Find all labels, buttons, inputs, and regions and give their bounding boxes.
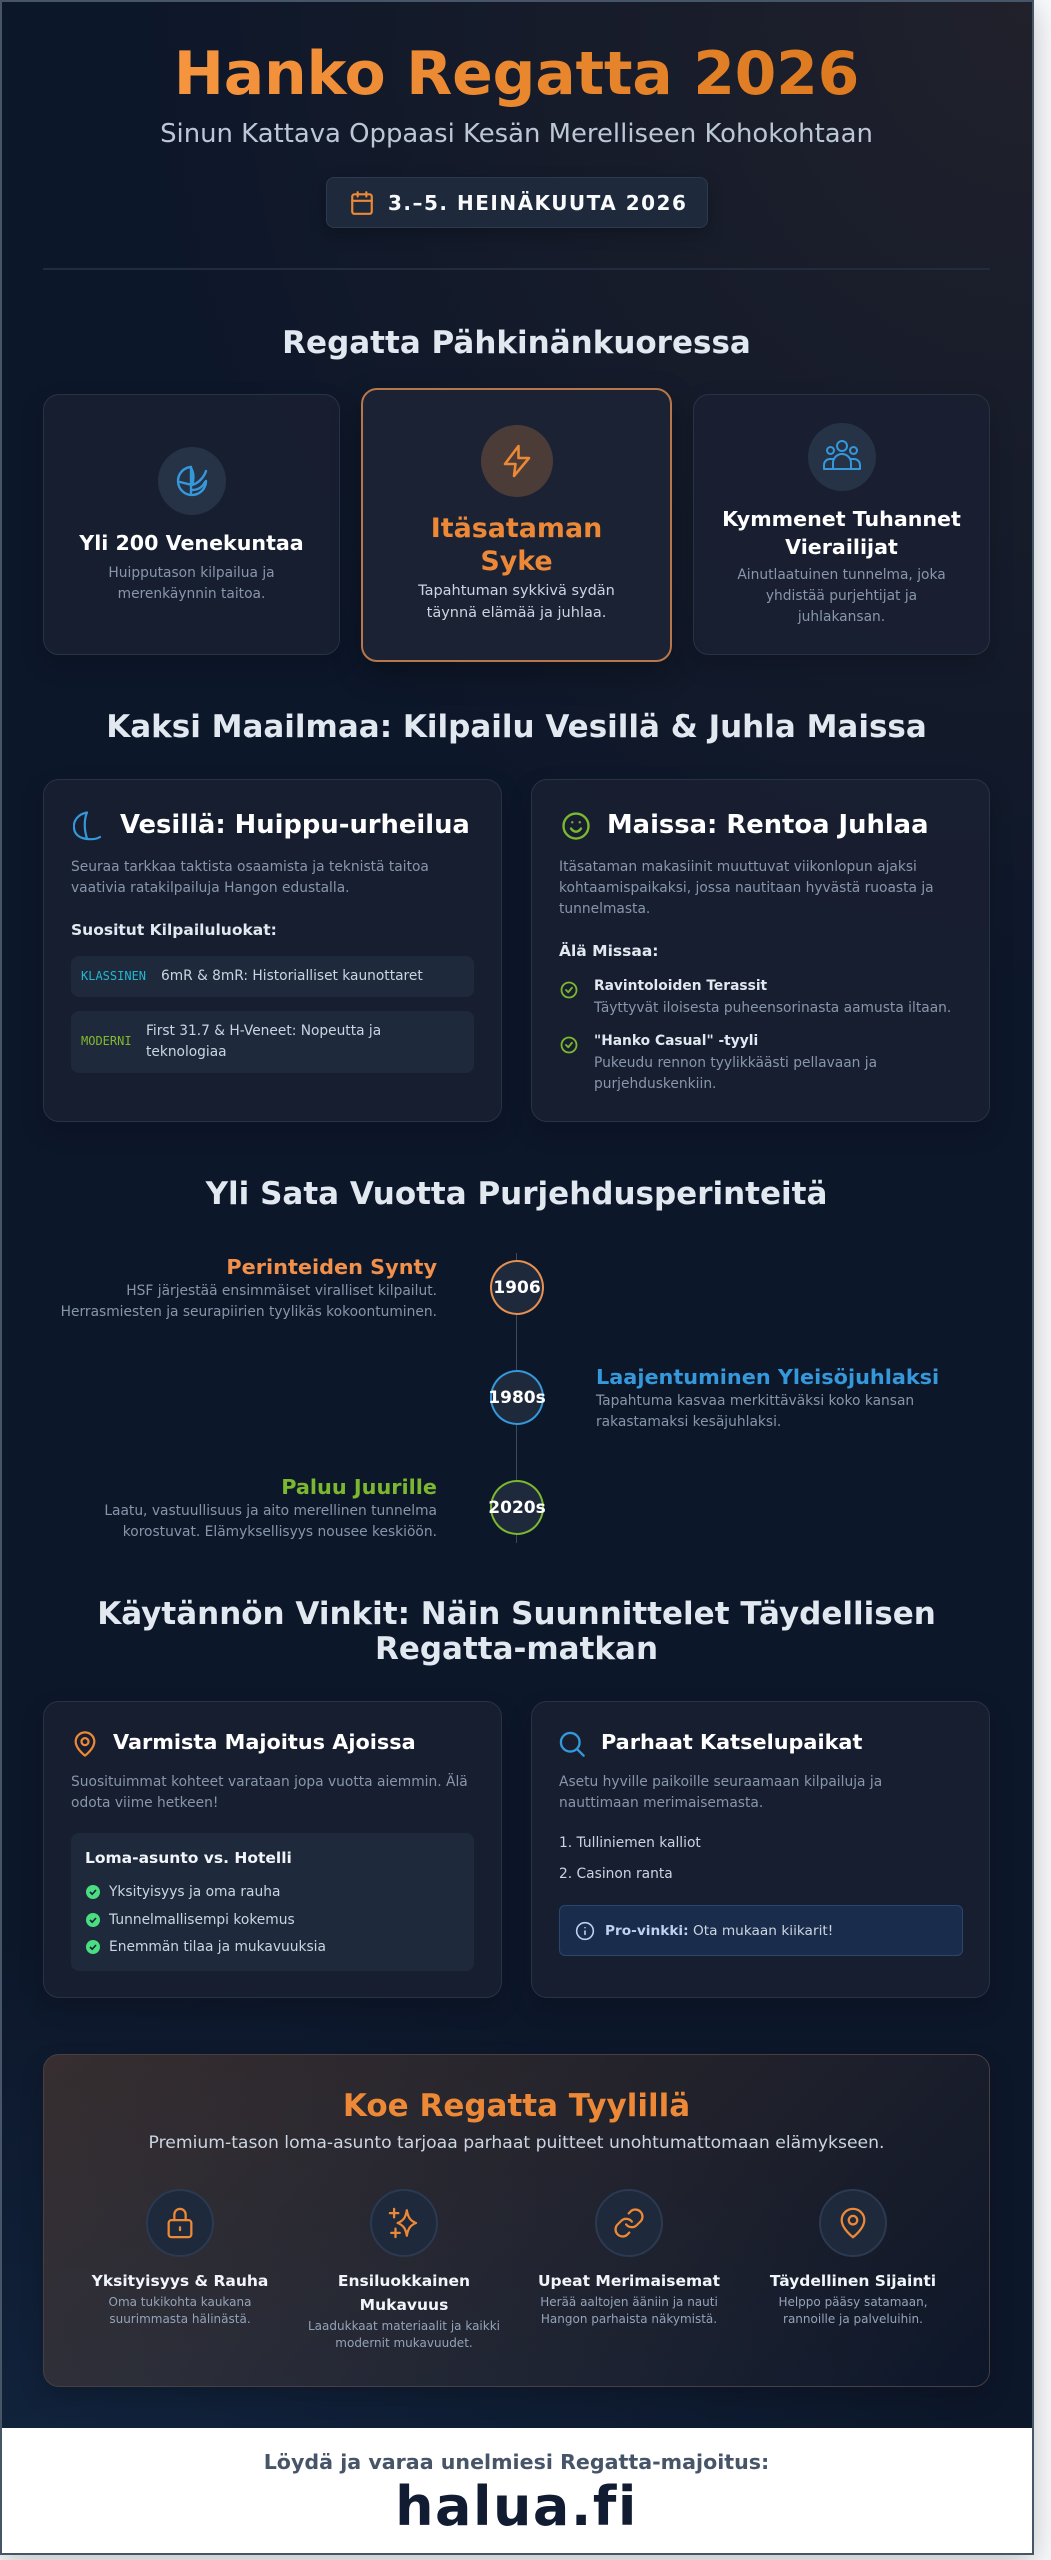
feature text	[108, 2295, 252, 2326]
stat description	[418, 583, 615, 621]
milestone text: korostuvat. Elämyksellisyys nousee keskiöön.	[123, 1524, 437, 1540]
feature title: Täydellinen Sijainti	[770, 2272, 936, 2290]
feature title: Mukavuus	[360, 2296, 448, 2314]
milestone 1906	[61, 1255, 544, 1320]
panel: stat visitors	[693, 394, 990, 655]
feature text: Laadukkaat materiaalit ja kaikki	[308, 2319, 500, 2333]
panel description: Asetu hyville paikoille seuraamaan kilpailuja ja	[559, 1774, 882, 1790]
icon: lock	[146, 2189, 214, 2257]
tag: KLASSINEN	[81, 969, 146, 983]
milestone text: Herrasmiesten ja seurapiirien tyylikäs kokoontuminen.	[61, 1304, 437, 1320]
stat title: Itäsataman	[431, 513, 602, 544]
milestone text	[61, 1283, 437, 1320]
row text: teknologiaa	[146, 1044, 227, 1060]
panel description: Suosituimmat kohteet varataan jopa vuotta aiemmin. Älä	[71, 1774, 468, 1790]
stat title: Yli 200 Venekuntaa	[79, 531, 304, 555]
box title: Loma-asunto vs. Hotelli	[85, 1849, 292, 1867]
panel description: Seuraa tarkkaa taktista osaamista ja teknistä taitoa	[71, 859, 429, 875]
panel title: Parhaat Katselupaikat	[601, 1730, 862, 1754]
milestone text: rakastamaksi kesäjuhlaksi.	[596, 1414, 781, 1430]
icon: check	[560, 1036, 578, 1054]
panel description: tunnelmasta.	[559, 901, 650, 917]
panel description: kohtaamispaikaksi, jossa nautitaan hyvästä ruoasta ja	[559, 880, 934, 896]
panel title: Varmista Majoitus Ajoissa	[113, 1730, 416, 1754]
panel description: nauttimaan merimaisemasta.	[559, 1795, 763, 1811]
panel description	[559, 859, 934, 917]
icon: people circle	[808, 423, 876, 491]
sub heading: Suositut Kilpailuluokat:	[71, 921, 277, 939]
benefit 3: Enemmän tilaa ja mukavuuksia	[109, 1939, 326, 1955]
feature text: suurimmasta hälinästä.	[109, 2312, 251, 2326]
milestone title: Laajentuminen Yleisöjuhlaksi	[596, 1365, 939, 1389]
year badge: 1906	[493, 1278, 541, 1298]
date text: 3.–5. HEINÄKUUTA 2026	[388, 191, 687, 215]
year badge: 1980s	[488, 1388, 546, 1408]
panel: on the water	[43, 779, 502, 1122]
item description: Pukeudu rennon tyylikkäästi pellavaan ja	[594, 1055, 877, 1071]
stat title: Kymmenet Tuhannet	[722, 507, 961, 531]
milestone text: HSF järjestää ensimmäiset viralliset kilpailut.	[126, 1283, 437, 1299]
cta title: Koe Regatta Tyylillä	[343, 2088, 690, 2124]
icon: pin	[819, 2189, 887, 2257]
panel: stat boats	[43, 394, 340, 655]
stat description	[737, 567, 946, 625]
feature text	[515, 2294, 743, 2328]
heading: nutshell: Regatta Pähkinänkuoressa	[282, 325, 751, 361]
feature: location	[739, 2189, 967, 2359]
milestone text	[104, 1503, 437, 1540]
heading: practical tips: Käytännön Vinkit: Näin Suunnittelet Täydellisen	[97, 1596, 936, 1632]
tip text: Pro-vinkki: Ota mukaan kiikarit!	[605, 1923, 833, 1939]
icon: lightning circle	[481, 425, 553, 497]
milestone 2020s	[104, 1475, 546, 1540]
milestone title: Perinteiden Synty	[226, 1255, 437, 1279]
icon: calendar	[351, 191, 373, 215]
panel title: Vesillä: Huippu-urheilua	[120, 810, 470, 840]
milestone text	[596, 1393, 914, 1430]
milestone title: Paluu Juurille	[281, 1475, 437, 1499]
panel description: Itäsataman makasiinit muuttuvat viikonlopun ajaksi	[559, 859, 917, 875]
icon: pin	[74, 1731, 96, 1757]
milestone text: Tapahtuma kasvaa merkittäväksi koko kansan	[596, 1393, 914, 1409]
year badge	[490, 1370, 544, 1425]
timeline	[61, 1253, 939, 1543]
list item: terraces	[560, 978, 951, 1016]
heading: practical tips	[97, 1596, 936, 1667]
icon: search	[560, 1732, 585, 1757]
panel description	[71, 1773, 468, 1811]
class row: modern	[71, 1011, 474, 1073]
icon: check	[560, 982, 578, 998]
stat description: Ainutlaatuinen tunnelma, joka	[737, 567, 946, 583]
panel description: vaativia ratakilpailuja Hangon edustalla.	[71, 880, 350, 896]
stat title: Syke	[480, 546, 553, 577]
tag: MODERNI	[81, 1034, 132, 1048]
feature title: Yksityisyys & Rauha	[92, 2272, 268, 2290]
comparison box	[71, 1833, 474, 1971]
heading: two worlds: Kaksi Maailmaa: Kilpailu Vesillä & Juhla Maissa	[106, 709, 927, 745]
ordered list: 2. Casinon ranta	[559, 1866, 673, 1882]
stat description: täynnä elämää ja juhlaa.	[427, 605, 606, 621]
item text: Ravintoloiden Terassit	[594, 978, 767, 994]
row text	[146, 1023, 381, 1060]
panel: viewing spots	[531, 1701, 990, 1998]
stat title: Vierailijat	[785, 535, 898, 559]
panel description: odota viime hetkeen!	[71, 1795, 218, 1811]
feature text: Hangon parhaista näkymistä.	[541, 2312, 717, 2326]
icon: sailboat circle	[158, 447, 226, 515]
feature: views	[515, 2189, 743, 2359]
footer label: Löydä ja varaa unelmiesi Regatta-majoitus:	[264, 2450, 769, 2474]
icon: smile	[562, 812, 590, 840]
date badge	[326, 177, 708, 228]
row text: 6mR & 8mR: Historialliset kaunottaret	[161, 968, 423, 984]
check list	[86, 1884, 326, 1955]
feature text	[290, 2318, 518, 2352]
feature title	[338, 2272, 470, 2314]
icon: sparkles	[370, 2189, 438, 2257]
stat description: juhlakansan.	[798, 609, 885, 625]
panel description	[71, 859, 429, 896]
icon: link	[595, 2189, 663, 2257]
feature text: Herää aaltojen ääniin ja nauti	[540, 2295, 718, 2309]
icon: info	[576, 1922, 594, 1940]
sub heading: Älä Missaa:	[559, 942, 658, 960]
stat title	[431, 513, 602, 577]
list item: casual style	[560, 1033, 877, 1092]
benefit 2: Tunnelmallisempi kokemus	[109, 1912, 295, 1928]
feature text: modernit mukavuudet.	[335, 2336, 473, 2350]
feature text: Helppo pääsy satamaan,	[778, 2295, 928, 2309]
item description: purjehduskenkiin.	[594, 1076, 716, 1092]
panel: accommodation	[43, 1701, 502, 1998]
class row: classic	[71, 956, 474, 997]
panel: on land	[531, 779, 990, 1122]
year badge: 2020s	[488, 1498, 546, 1518]
panel: premium call to action	[43, 2054, 990, 2387]
stat description	[108, 565, 275, 602]
milestone 1980s	[488, 1365, 939, 1430]
callout: pro tip	[559, 1905, 963, 1956]
panel: stat highlight	[361, 388, 672, 662]
feature text: Oma tukikohta kaukana	[108, 2295, 252, 2309]
stat description: Huipputason kilpailua ja	[108, 565, 275, 581]
stat description: merenkäynnin taitoa.	[118, 586, 265, 602]
footer	[2, 2428, 1032, 2553]
feature: comfort	[308, 2189, 500, 2350]
footer brand: halua.fi	[395, 2475, 638, 2538]
stat description: Tapahtuman sykkivä sydän	[418, 583, 615, 599]
heading: history: Yli Sata Vuotta Purjehdusperinteitä	[206, 1176, 827, 1212]
feature title: Ensiluokkainen	[338, 2272, 470, 2290]
ordered list: 1. Tulliniemen kalliot	[559, 1835, 701, 1851]
feature: privacy	[92, 2189, 268, 2326]
panel title: Maissa: Rentoa Juhlaa	[607, 810, 928, 840]
panel description	[559, 1774, 882, 1811]
feature title: Upeat Merimaisemat	[538, 2272, 720, 2290]
stat title	[722, 507, 961, 559]
ordered list	[559, 1835, 701, 1882]
title: Hanko Regatta 2026	[174, 39, 859, 109]
heading: practical tips: Regatta-matkan	[375, 1631, 658, 1667]
item text: "Hanko Casual" -tyyli	[594, 1033, 758, 1049]
feature text	[739, 2294, 967, 2328]
item description: Täyttyvät iloisesta puheensorinasta aamusta iltaan.	[594, 1000, 951, 1016]
subtitle: Sinun Kattava Oppaasi Kesän Merelliseen Kohokohtaan	[160, 119, 873, 149]
milestone text: Laatu, vastuullisuus ja aito merellinen tunnelma	[104, 1503, 437, 1519]
stat description: yhdistää purjehtijat ja	[766, 588, 917, 604]
year badge	[490, 1480, 544, 1535]
benefit 1: Yksityisyys ja oma rauha	[109, 1884, 280, 1900]
item description	[594, 1055, 877, 1092]
row text: First 31.7 & H-Veneet: Nopeutta ja	[146, 1023, 381, 1039]
icon: sail	[73, 811, 102, 840]
feature text: rannoille ja palveluihin.	[783, 2312, 923, 2326]
cta subtitle: Premium-tason loma-asunto tarjoaa parhaat puitteet unohtumattomaan elämykseen.	[149, 2133, 884, 2153]
year badge	[490, 1260, 544, 1315]
